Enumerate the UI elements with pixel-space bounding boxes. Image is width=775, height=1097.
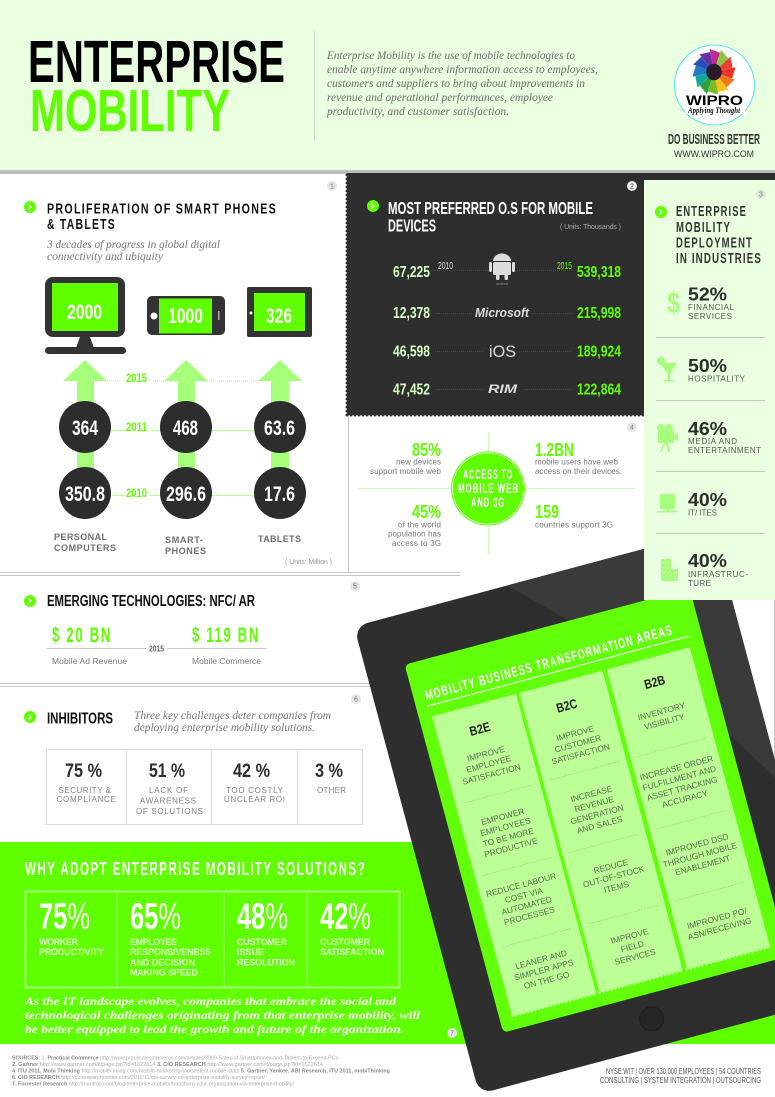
subtitle: 3 decades of progress in global digital bbox=[46, 239, 220, 251]
Wipro logo: WIPRO bbox=[686, 92, 743, 108]
bullet bbox=[24, 711, 36, 723]
column: B2B: INCREASE ORDER bbox=[639, 753, 714, 782]
column: B2E: EMPOWER bbox=[480, 806, 525, 827]
heading bbox=[676, 203, 762, 267]
category labels: PHONES bbox=[165, 546, 206, 556]
section rules bbox=[0, 415, 775, 790]
panel: most preferred OS: 2010 bbox=[438, 261, 453, 272]
table: OF SOLUTIONS bbox=[136, 807, 203, 816]
item: hospitality bbox=[657, 356, 746, 384]
stats box: ISSUE bbox=[237, 947, 264, 957]
data values: 296.6 bbox=[166, 483, 206, 506]
2015 values: 215,998 bbox=[577, 305, 621, 322]
column: B2E: EMPLOYEE bbox=[465, 753, 513, 775]
2015 values: 122,864 bbox=[577, 382, 621, 398]
subtitle: connectivity and ubiquity bbox=[47, 251, 164, 263]
stats box: EMPLOYEE bbox=[130, 937, 177, 947]
stat: 45%: of the world bbox=[398, 520, 441, 530]
heading: WHY ADOPT ENTERPRISE MOBILITY SOLUTIONS? bbox=[25, 859, 366, 879]
description: Three key challenges deter companies from bbox=[134, 710, 331, 722]
item: media: MEDIA AND bbox=[688, 437, 737, 446]
column: B2C: B2C bbox=[555, 696, 579, 716]
closing statement bbox=[24, 996, 421, 1036]
Wipro logo: Applying Thought bbox=[687, 106, 741, 115]
tagline bbox=[668, 131, 760, 159]
column: B2B: ACCURACY bbox=[661, 788, 709, 810]
column: B2E: REDUCE LABOUR bbox=[485, 871, 557, 899]
item: financial services: 52% bbox=[688, 284, 727, 304]
stats box: CUSTOMER bbox=[237, 937, 288, 947]
stat: 85% bbox=[370, 440, 442, 476]
stats box: 48% bbox=[237, 896, 288, 937]
column: B2C: SATISFACTION bbox=[550, 741, 611, 766]
item: media bbox=[657, 419, 761, 455]
subtitle bbox=[46, 239, 220, 263]
column: B2E: EMPLOYEES bbox=[479, 815, 532, 838]
category labels bbox=[54, 532, 301, 556]
table: 75 % bbox=[65, 761, 102, 782]
bullet bbox=[24, 595, 36, 607]
data values: 364 bbox=[72, 417, 98, 440]
closing statement: As the IT landscape evolves, companies that embrace the social and bbox=[24, 996, 396, 1008]
column: B2B: ASN/RECEIVING bbox=[687, 915, 753, 942]
company facts bbox=[600, 1067, 761, 1085]
tablet title bbox=[422, 618, 689, 706]
column: B2E: SATISFACTION bbox=[461, 762, 522, 787]
sources: 7. Forrester Research http://mantras.com/blog/enterprise-mobility/transform-your-organization-via-enterprise-mobility/ bbox=[12, 1082, 295, 1088]
stat: 45% bbox=[388, 502, 441, 548]
table: TOO COSTLY bbox=[226, 786, 284, 795]
column: B2E: LEANER AND bbox=[514, 948, 568, 971]
column: B2E bbox=[432, 694, 596, 1016]
column: B2C: REDUCE bbox=[592, 857, 630, 876]
panel: deployment in industries: 3 bbox=[759, 192, 763, 198]
panel: why adopt bbox=[0, 842, 775, 1044]
year labels: 2010 bbox=[126, 486, 147, 500]
table: OTHER bbox=[317, 786, 346, 795]
intro paragraph bbox=[326, 50, 598, 118]
column: B2B: ASSET TRACKING bbox=[646, 774, 719, 803]
panel: proliferation bbox=[24, 181, 337, 566]
title bbox=[28, 29, 285, 144]
column: B2B: IMPROVED PO/ bbox=[686, 905, 748, 931]
2010 values bbox=[393, 264, 430, 398]
year labels: 2011 bbox=[126, 420, 147, 434]
stat: 1.2BN: access on their devices. bbox=[535, 467, 622, 476]
values: Mobile Commerce bbox=[192, 656, 261, 666]
item: infrastructure: INFRASTRUC- bbox=[688, 570, 748, 579]
stats box: 75% bbox=[39, 896, 90, 937]
panel: emerging technologies bbox=[24, 581, 360, 666]
stat: 1.2BN: mobile users have web bbox=[535, 458, 619, 466]
bullet bbox=[655, 206, 667, 218]
panel: access to mobile web bbox=[359, 422, 637, 554]
home button bbox=[637, 1004, 666, 1034]
item: media: ENTERTAINMENT bbox=[688, 446, 761, 455]
data values: 17.6 bbox=[264, 483, 295, 506]
sources: 4. ITU 2011, Mobi Thinking http://mobithinking.com/mobile-marketing-tools/latest-mobile-stats 5. Gartner, Yankee, ABI Research, ITU 2011, mobiThinking bbox=[12, 1068, 390, 1074]
column: B2C: AND SALES bbox=[576, 814, 624, 836]
column: B2E: SIMPLER APPS bbox=[513, 957, 575, 982]
central circle: MOBILE WEB bbox=[458, 480, 519, 496]
column: B2C: FIELD bbox=[620, 938, 645, 954]
column: B2C: CUSTOMER bbox=[554, 733, 602, 755]
stat: 45%: access to 3G bbox=[392, 539, 441, 548]
stats box: 65% bbox=[130, 896, 181, 937]
tablet: mobility business transformation areas bbox=[354, 530, 775, 1094]
stat: 85%: support mobile web bbox=[370, 467, 442, 476]
table: UNCLEAR ROI bbox=[224, 795, 285, 804]
data values: 468 bbox=[173, 417, 198, 440]
column: B2E: PROCESSES bbox=[503, 904, 556, 927]
table: SECURITY & bbox=[58, 786, 112, 795]
column: B2C: IMPROVE bbox=[555, 723, 595, 743]
panel: why adopt: 7 bbox=[450, 1030, 454, 1038]
closing statement: be better equipped to lead the growth and future of the organization. bbox=[25, 1024, 404, 1036]
stats box: AND DECISION bbox=[130, 958, 195, 968]
panel: proliferation: 1 bbox=[330, 184, 334, 190]
column: B2C bbox=[519, 671, 683, 992]
stat: 159 bbox=[535, 502, 613, 530]
table: 3 % bbox=[315, 761, 343, 782]
units: ( Units: Thousands ) bbox=[560, 224, 621, 231]
item: financial services bbox=[667, 284, 735, 321]
table bbox=[46, 750, 362, 824]
stats box: 42% bbox=[320, 896, 371, 937]
stats box: CUSTOMER bbox=[320, 937, 370, 947]
year labels: 2015 bbox=[126, 371, 147, 385]
item: IT: IT/ ITES bbox=[688, 508, 717, 518]
table: 42 % bbox=[233, 761, 270, 782]
item: infrastructure: 40% bbox=[688, 551, 727, 571]
heading: MOBILITY bbox=[676, 219, 731, 236]
item: IT: 40% bbox=[688, 490, 727, 510]
stat: 159: 159 bbox=[535, 502, 559, 522]
category labels: SMART- bbox=[165, 535, 203, 545]
column: B2E: AUTOMATED bbox=[500, 894, 553, 917]
panel: access to mobile web: 4 bbox=[630, 424, 634, 432]
column: B2C: INCREASE bbox=[569, 783, 614, 804]
heading: & TABLETS bbox=[47, 216, 116, 233]
intro paragraph: customers and suppliers to bring about improvements in bbox=[327, 78, 585, 90]
stat: 1.2BN: 1.2BN bbox=[535, 440, 574, 460]
item: financial services: SERVICES bbox=[688, 312, 732, 321]
item: hospitality: HOSPITALITY bbox=[688, 374, 746, 384]
units: ( Units: Million ) bbox=[285, 559, 332, 566]
stats box: MAKING SPEED bbox=[130, 968, 198, 978]
icon: tablet: 326 bbox=[266, 305, 292, 328]
column: B2C: REVENUE bbox=[573, 794, 615, 814]
intro paragraph: revenue and operational performances, employee bbox=[327, 92, 553, 104]
icon: android bbox=[488, 254, 516, 286]
column: B2B: FULFILLMENT AND bbox=[641, 763, 717, 793]
values: Mobile Ad Revenue bbox=[52, 656, 127, 666]
column: B2C: GENERATION bbox=[569, 803, 625, 826]
icon: monitor bbox=[45, 277, 126, 354]
logo: iOS: iOS bbox=[489, 342, 516, 361]
bullet bbox=[367, 200, 379, 212]
column: B2E: TO BE MORE bbox=[482, 825, 535, 849]
bullet bbox=[24, 201, 36, 213]
panel: most preferred OS bbox=[347, 173, 775, 415]
column: B2B: ENABLEMENT bbox=[674, 853, 731, 877]
heading: INHIBITORS bbox=[47, 710, 113, 728]
panel: most preferred OS: 2 bbox=[630, 184, 634, 190]
table: 51 % bbox=[149, 761, 185, 782]
column: B2B: INVENTORY bbox=[637, 700, 687, 722]
panel: emerging technologies: 5 bbox=[353, 584, 357, 590]
table: AWARENESS bbox=[140, 796, 196, 806]
panel: deployment in industries bbox=[644, 180, 775, 600]
2010 values: 47,452 bbox=[393, 382, 430, 398]
icon: phone bbox=[147, 296, 225, 335]
year labels bbox=[125, 370, 149, 500]
column: B2E: ON THE GO bbox=[523, 969, 571, 991]
data values bbox=[65, 417, 295, 506]
header band bbox=[0, 0, 775, 174]
logo: RIM: RIM bbox=[488, 382, 518, 396]
sources: 2. Gartner http://www.gartner.com/it/page.jsp?id=1622614 3. CIO RESEARCH http://www.gartner.com/it/page.jsp?id=1622614 bbox=[12, 1062, 323, 1068]
central circle: ACCESS TO bbox=[463, 466, 513, 482]
stats box: RESOLUTION bbox=[237, 958, 295, 968]
column: B2C: OUT-OF-STOCK bbox=[582, 863, 646, 890]
stats box: PRODUCTIVITY bbox=[39, 947, 104, 957]
2010 values: 46,598 bbox=[393, 344, 430, 360]
intro paragraph: productivity, and customer satisfaction. bbox=[326, 106, 509, 118]
2015 values bbox=[577, 264, 621, 398]
stat: 1.2BN bbox=[535, 440, 622, 476]
2010 values: 12,378 bbox=[393, 305, 430, 322]
column: B2B: THROUGH MOBILE bbox=[662, 840, 738, 869]
data values: 350.8 bbox=[65, 483, 105, 506]
arrows bbox=[63, 360, 302, 485]
item: infrastructure bbox=[661, 551, 748, 588]
data circles bbox=[59, 401, 306, 519]
heading: PROLIFERATION OF SMART PHONES bbox=[47, 200, 277, 218]
column: B2B: IMPROVED DSD bbox=[665, 831, 730, 858]
stats box: RESPONSIVENESS bbox=[130, 947, 211, 957]
panel: inhibitors bbox=[24, 694, 362, 824]
item: IT bbox=[657, 490, 727, 518]
central circle bbox=[451, 452, 525, 526]
icon: android: android bbox=[496, 282, 508, 286]
table: COMPLIANCE bbox=[56, 795, 116, 804]
heading bbox=[47, 200, 277, 233]
intro paragraph: enable anytime anywhere information access to employees, bbox=[327, 64, 598, 76]
heading: EMERGING TECHNOLOGIES: NFC/ AR bbox=[47, 593, 255, 610]
stat: 85%: new devices bbox=[396, 458, 441, 466]
heading: DEVICES bbox=[388, 216, 436, 236]
column: B2C: IMPROVE bbox=[610, 926, 650, 946]
item: hospitality: 50% bbox=[688, 356, 727, 376]
logo: RIM bbox=[484, 382, 522, 396]
icon: tablet bbox=[247, 287, 312, 337]
values: 2015 bbox=[149, 644, 164, 654]
values: $ 119 BN bbox=[192, 624, 260, 647]
logo: Microsoft: Microsoft bbox=[475, 305, 530, 320]
sources bbox=[12, 1056, 390, 1088]
item: infrastructure: TURE bbox=[688, 579, 711, 588]
column: B2C: SERVICES bbox=[613, 946, 657, 967]
sources: 6. CIO RESEARCH http://cioresearchcenter.com/2011/11/cio-survey-on-enterprise-mobility-survey-report/ bbox=[12, 1075, 266, 1081]
stat: 45%: population has bbox=[388, 530, 441, 538]
category labels: TABLETS bbox=[258, 534, 301, 544]
column: B2E: PRODUCTIVE bbox=[483, 835, 539, 859]
stats box: SATISFACTION bbox=[320, 947, 384, 957]
screen bbox=[405, 588, 775, 1033]
Wipro logo bbox=[674, 45, 754, 125]
panel: inhibitors: 6 bbox=[354, 696, 358, 704]
values: $ 20 BN bbox=[52, 624, 112, 647]
closing statement: technological challenges originating from that enterprise mobility, will bbox=[25, 1010, 421, 1022]
title: MOBILITY bbox=[30, 78, 230, 144]
icon: monitor: 2000 bbox=[67, 301, 102, 324]
2015 values: 189,924 bbox=[577, 344, 621, 360]
intro paragraph: Enterprise Mobility is the use of mobile technologies to bbox=[326, 50, 575, 62]
heading: MOST PREFERRED O.S FOR MOBILE bbox=[388, 198, 593, 218]
2015 values: 539,318 bbox=[577, 264, 621, 281]
column: B2E: COST VIA bbox=[504, 885, 544, 905]
column: B2C: ITEMS bbox=[603, 879, 630, 895]
description bbox=[134, 710, 331, 734]
values bbox=[47, 624, 267, 666]
column: B2B: B2B bbox=[643, 672, 667, 692]
2010 values: 67,225 bbox=[393, 264, 430, 281]
column: B2E: B2E bbox=[468, 719, 492, 739]
table: LACK OF bbox=[149, 786, 188, 795]
data values: 63.6 bbox=[264, 417, 295, 440]
stat: 159: countries support 3G bbox=[535, 520, 613, 530]
stats box: WORKER bbox=[39, 937, 78, 947]
category labels: PERSONAL bbox=[54, 532, 108, 542]
stats box bbox=[26, 891, 400, 988]
panel: most preferred OS: 2015 bbox=[557, 261, 572, 272]
column: B2B bbox=[607, 647, 770, 969]
tagline: WWW.WIPRO.COM bbox=[674, 149, 754, 159]
year guide lines bbox=[107, 381, 258, 496]
item: media: 46% bbox=[688, 419, 727, 439]
icon: phone: 1000 bbox=[168, 305, 203, 328]
stat: 45%: 45% bbox=[412, 502, 441, 522]
item: financial services: $ bbox=[667, 287, 680, 320]
sources: SOURCES: 1. Practical Commerce http://www.practicalecommerce.com/articles/3069-Sales-of-Smartphones-and-Tablets-to-Exceed-PCs- bbox=[12, 1056, 340, 1062]
description: deploying enterprise mobility solutions. bbox=[134, 722, 315, 734]
central circle: AND 3G bbox=[471, 494, 505, 510]
stat: 85%: 85% bbox=[412, 440, 441, 460]
column: B2E: IMPROVE bbox=[466, 744, 506, 764]
heading bbox=[388, 198, 593, 236]
category labels: COMPUTERS bbox=[54, 543, 116, 553]
title: ENTERPRISE bbox=[28, 29, 285, 95]
item: financial services: FINANCIAL bbox=[688, 303, 735, 312]
column: B2B: VISIBILITY bbox=[643, 711, 686, 732]
